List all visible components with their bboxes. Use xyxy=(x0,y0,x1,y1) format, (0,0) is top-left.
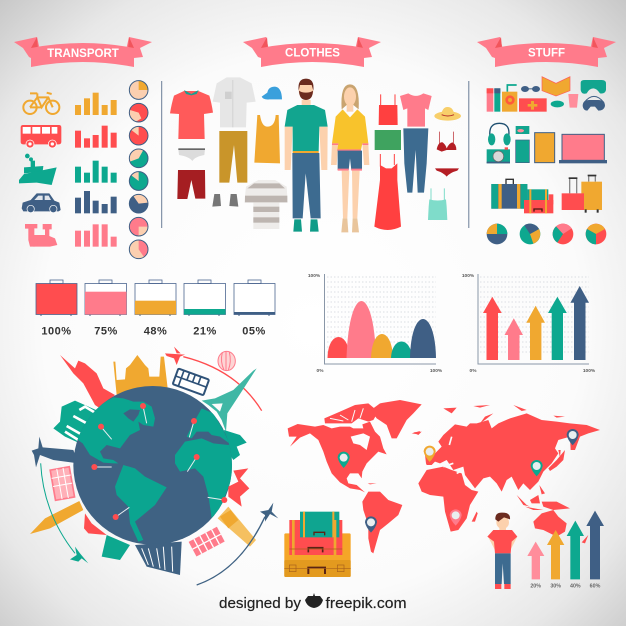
footer credit: designed by xyxy=(219,595,301,612)
colosseum teal xyxy=(53,401,96,443)
banner: clothes xyxy=(243,37,381,67)
map pin: china xyxy=(531,460,543,476)
pink t-shirt xyxy=(400,93,432,127)
yellow bottle xyxy=(502,85,517,112)
man figure xyxy=(285,79,328,232)
striped shirt xyxy=(244,180,288,229)
chart: arrows: 100% xyxy=(583,368,596,374)
stacked suitcases xyxy=(284,512,351,577)
pie chart 2 xyxy=(520,224,540,244)
plane and trail xyxy=(165,347,262,411)
bar chart: pink xyxy=(75,224,117,247)
suitcase 05% xyxy=(234,280,275,338)
mustard trousers xyxy=(219,131,247,183)
blue cap xyxy=(262,87,282,99)
banner: clothes: CLOTHES xyxy=(285,48,340,60)
icon: car xyxy=(22,193,61,213)
red opera shape xyxy=(228,468,249,507)
green skirt xyxy=(375,130,401,150)
pink bus left xyxy=(50,467,75,500)
navy plane and arc xyxy=(197,503,278,585)
suitcase 48%: 48% xyxy=(144,326,167,338)
straw hat xyxy=(434,107,461,121)
books xyxy=(487,88,500,112)
map pin: russia xyxy=(567,429,579,445)
panel: clothes xyxy=(170,77,461,232)
double decker bus: navy xyxy=(173,368,209,395)
bar chart: yellow xyxy=(75,93,117,115)
teal disc xyxy=(551,101,564,107)
pie chart 4 xyxy=(586,224,606,244)
chart: area humps: 100% xyxy=(430,368,443,374)
suitcase 21%: 21% xyxy=(193,326,217,338)
chart: area humps xyxy=(308,273,443,374)
suitcase 48% xyxy=(135,280,176,338)
phone xyxy=(516,140,529,163)
navy mask xyxy=(583,96,605,111)
eiffel tower xyxy=(202,368,257,432)
banner: stuff: STUFF xyxy=(528,48,565,60)
teal monument east xyxy=(224,430,247,460)
icon: freepik crown logo xyxy=(305,593,323,608)
globe sphere and continents xyxy=(73,386,237,545)
pink bus right xyxy=(189,527,225,557)
chart: arrows xyxy=(462,273,596,374)
globe illustration xyxy=(30,347,278,585)
yellow tank top xyxy=(254,115,280,163)
teal arc and plane xyxy=(41,463,88,563)
red bra xyxy=(437,132,456,152)
chart: area humps: 0% xyxy=(317,368,324,374)
chart: arrows: 0% xyxy=(470,368,477,374)
leaning tower xyxy=(218,507,256,547)
suitcase 05%: 05% xyxy=(242,326,266,338)
taj mahal xyxy=(113,355,168,395)
map pins xyxy=(91,403,227,520)
suitcase 21% xyxy=(184,280,226,338)
red briefs xyxy=(435,168,459,177)
tablet xyxy=(535,133,555,163)
stacked luggage xyxy=(524,189,553,213)
first aid case xyxy=(519,98,547,112)
bar chart: navy xyxy=(75,191,117,213)
camera xyxy=(487,147,510,163)
open book xyxy=(542,77,570,96)
map pin: south america xyxy=(365,516,377,533)
pink cup xyxy=(568,94,578,108)
pie icons xyxy=(129,81,148,259)
arrow chart with labels: 30% xyxy=(550,584,561,590)
banner: transport xyxy=(14,37,152,67)
panel: suitcase fill levels xyxy=(36,280,275,338)
trolley bags xyxy=(562,175,602,213)
suitcase 75% xyxy=(85,280,126,338)
big ben xyxy=(30,501,83,534)
icon: bicycle xyxy=(23,93,59,114)
icon: train xyxy=(25,224,57,247)
white shirt xyxy=(213,77,256,127)
footer credit xyxy=(219,593,406,612)
arrow chart with labels: 20% xyxy=(530,584,541,590)
navy suitcase xyxy=(491,179,527,209)
panel: transport xyxy=(19,81,148,259)
map pin: north america xyxy=(338,452,350,468)
suitcase 100%: 100% xyxy=(41,326,72,338)
bar chart: teal xyxy=(75,161,117,183)
hot air balloon xyxy=(218,351,235,371)
bar chart: red xyxy=(75,126,117,148)
navy pillared building xyxy=(135,542,182,575)
banner: stuff xyxy=(477,37,616,67)
icon: bus xyxy=(21,125,61,148)
christ statue xyxy=(32,437,78,467)
footer credit: freepik.com xyxy=(326,595,406,612)
chart: area humps: 100% xyxy=(308,273,321,279)
pie chart 3 xyxy=(553,224,573,244)
woman figure xyxy=(331,84,369,232)
arrow chart with labels: 60% xyxy=(590,584,601,590)
red dress xyxy=(374,154,401,230)
world map xyxy=(284,400,604,590)
red top xyxy=(379,94,398,125)
laptop xyxy=(559,134,607,163)
red t-shirt xyxy=(170,90,213,139)
south red landmark xyxy=(84,513,107,535)
dark red shorts xyxy=(177,170,205,199)
panel: stuff xyxy=(487,77,607,244)
statue of liberty xyxy=(60,355,115,408)
americas and greenland xyxy=(288,400,422,553)
eurasia africa australia xyxy=(412,405,600,543)
sunglasses xyxy=(521,86,540,92)
grey shoes xyxy=(212,194,238,207)
chart: arrows: 100% xyxy=(462,273,475,279)
teal monument bottom xyxy=(102,535,130,560)
underwear xyxy=(178,148,205,161)
teal mask xyxy=(581,80,606,94)
headphones xyxy=(488,123,511,145)
banner: transport: TRANSPORT xyxy=(47,48,119,60)
mint top xyxy=(428,188,447,220)
arrow chart with labels xyxy=(527,511,604,590)
icon: ship xyxy=(19,154,57,185)
blue jeans xyxy=(403,128,428,193)
small teal device xyxy=(516,126,529,134)
boy figure xyxy=(487,513,517,589)
map pin: africa xyxy=(450,509,462,526)
suitcase 100% xyxy=(36,280,77,338)
arrow chart with labels: 40% xyxy=(570,584,581,590)
pie chart 1 xyxy=(487,224,507,244)
suitcase 75%: 75% xyxy=(94,326,118,338)
map pin: europe xyxy=(424,446,436,462)
